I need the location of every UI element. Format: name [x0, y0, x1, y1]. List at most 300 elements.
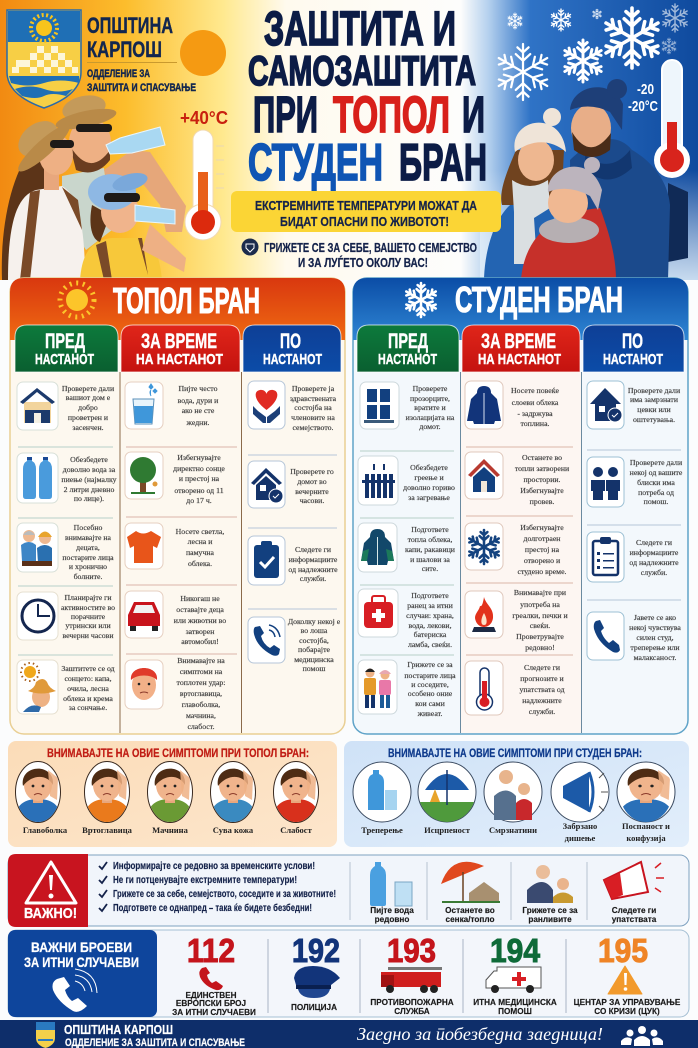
text: престој на: [525, 545, 560, 554]
icon: heart in hands: [248, 381, 285, 429]
icon: t-shirt: [125, 523, 163, 569]
text: медицинска: [294, 655, 334, 664]
icon: clipboard: [248, 536, 285, 585]
text: ламба, свеќи.: [408, 640, 452, 649]
text: отворено и: [524, 556, 560, 565]
number: 112: ЗА ИТНИ СЛУЧАЕВИ: [172, 1008, 256, 1017]
text: упатствата од: [519, 685, 565, 694]
number: 193: 193: [387, 932, 436, 969]
text: помош: [303, 664, 325, 673]
symptom labels: Треперење: [361, 825, 403, 835]
panel: heat symptoms: [8, 741, 337, 847]
text: Подгответе: [411, 525, 449, 534]
text: облека и крема: [63, 694, 113, 703]
column: before: НАСТАНОТ: [35, 351, 94, 368]
footer municipality text: ОПШТИНА КАРПОШ: [64, 1023, 173, 1037]
icon: snowflake: [465, 523, 503, 570]
temperature -20: -20°C: [628, 98, 658, 115]
column: after: ПО: [622, 330, 643, 353]
column: after: ПО: [280, 330, 301, 353]
warning banner: ЕКСТРЕМНИТЕ ТЕМПЕРАТУРИ МОЖАТ ДА: [255, 198, 477, 213]
text: и престој на: [179, 474, 220, 483]
hot thermometer: [185, 130, 224, 240]
icon: elderly and children: [17, 523, 58, 572]
text: домот во: [297, 477, 327, 486]
tip: care for vulnerable: ранливите: [528, 915, 572, 924]
number: 112: ЕДИНСТВЕН: [185, 991, 237, 1000]
text: Следете ги: [636, 538, 672, 547]
text: очила, лесна: [67, 684, 109, 693]
icon: clock: [17, 592, 58, 640]
woman: [2, 114, 85, 280]
text: Обезбедете: [410, 463, 448, 472]
text: Внимавајте на: [177, 656, 225, 665]
text: или животни во: [174, 616, 226, 625]
text: отворено од 11: [174, 486, 224, 495]
column: after: НАСТАНОТ: [603, 351, 663, 368]
column: before: ПРЕД: [45, 330, 85, 353]
icon: telephone: [248, 617, 285, 663]
text: постарите лица: [404, 671, 456, 680]
footer municipality text: [64, 1023, 245, 1048]
icon: tree: [125, 452, 163, 499]
text: блиски има: [637, 478, 675, 487]
text: слабост.: [187, 722, 215, 731]
woman: [484, 108, 566, 278]
text: Проверете: [413, 384, 448, 393]
text: директно сонце: [173, 464, 225, 473]
symptom: frostbite: [484, 762, 542, 822]
icon: warm house: [465, 452, 503, 499]
symptom labels: конфузија: [626, 833, 666, 843]
symptom: rapid breathing: [551, 762, 609, 822]
tip: follow instructions: упатствата: [612, 915, 657, 924]
text: информациите: [289, 555, 338, 564]
text: Доколку некој е: [288, 617, 341, 626]
column: during: НА НАСТАНОТ: [136, 351, 223, 368]
main title: БРАН: [399, 134, 487, 192]
text: Внимавајте при: [514, 588, 566, 597]
panel: cold symptoms: [344, 741, 689, 847]
text: топлотен удар:: [177, 678, 225, 687]
number: 193: СЛУЖБА: [394, 1007, 430, 1016]
icon: snowflake: [404, 283, 438, 317]
number: 195: СО КРИЗИ (ЦУК): [594, 1007, 660, 1016]
icon: thermometer: [465, 661, 503, 715]
icon: people: [621, 1026, 663, 1046]
text: батериска: [414, 630, 447, 639]
tip: stay in shade: Останете во: [445, 906, 495, 915]
icon: heatstroke face: [125, 660, 163, 709]
text: некој од вашите: [630, 468, 683, 477]
text: Останете во: [522, 453, 562, 462]
text: Посебно: [74, 523, 102, 532]
cold thermometer: [654, 60, 690, 178]
text: некој чувствува: [629, 623, 681, 632]
warning banner: [231, 191, 501, 232]
text: Пијте често: [178, 384, 218, 393]
symptom labels: Слабост: [280, 825, 313, 835]
main title: САМОЗАШТИТА: [248, 47, 476, 94]
text: употреба на: [520, 600, 560, 609]
text: прогнозите и: [520, 674, 564, 683]
heading box: ЗА ИТНИ СЛУЧАЕВИ: [24, 955, 139, 970]
municipality name: ОДДЕЛЕНИЕ ЗА: [87, 68, 150, 80]
text: прозорците,: [410, 394, 450, 403]
care message: ГРИЖЕТЕ СЕ ЗА СЕБЕ, ВАШЕТО СЕМЕЈСТВО: [264, 241, 477, 255]
number: 194: ПОМОШ: [498, 1007, 532, 1016]
icon: sun: [60, 283, 94, 317]
symptom labels: Поспаност и: [622, 821, 670, 831]
text: и шалови за: [410, 555, 450, 564]
text: Избегнувајте: [520, 486, 564, 495]
text: вечерните: [295, 487, 329, 496]
text: постарите лица: [62, 553, 114, 562]
text: Обезбедете: [70, 455, 108, 464]
text: засенчен.: [72, 423, 104, 432]
column: during: ЗА ВРЕМЕ: [481, 330, 556, 353]
text: потреба од: [638, 488, 674, 497]
tip: drink water: [370, 862, 414, 924]
icon: window: [360, 382, 399, 429]
column: during: НА НАСТАНОТ: [478, 351, 561, 368]
icon: glass of water: [125, 382, 163, 429]
text: живеат.: [417, 709, 442, 718]
text: Избегнувајте: [520, 523, 564, 532]
column: after: [583, 325, 684, 372]
icon: care shield: [242, 238, 258, 256]
icon: sun protection: [17, 660, 58, 714]
text: внимавајте на: [65, 533, 112, 542]
text: вашиот дом е: [66, 393, 111, 402]
text: и соседите,: [411, 680, 449, 689]
number: 194: 194: [490, 932, 541, 969]
column: before: НАСТАНОТ: [378, 351, 437, 368]
main title: СТУДЕН: [248, 134, 383, 192]
text: затворен: [186, 627, 214, 636]
municipal shield logo: [7, 10, 81, 108]
symptom: drowsiness and confusion: [617, 762, 675, 824]
text: во лоша: [301, 626, 328, 635]
text: Проверете дали: [630, 458, 682, 467]
heading: ВНИМАВАЈТЕ НА ОВИЕ СИМПТОМИ ПРИ ТОПОЛ БРАН:: [47, 746, 309, 760]
number: 194: [473, 932, 557, 1016]
text: мачнина,: [186, 711, 216, 720]
text: греалки, печки и: [512, 611, 568, 620]
text: свеќи.: [530, 621, 550, 630]
warning banner: БИДАТ ОПАСНИ ПО ЖИВОТОТ!: [280, 214, 449, 229]
tip: stay in shade: [441, 862, 500, 924]
icon: water bottles: [17, 453, 58, 503]
text: редовно!: [525, 643, 555, 652]
child: [521, 157, 616, 280]
text: Следете ги: [295, 545, 331, 554]
text: служби.: [529, 707, 555, 716]
text: капи, ракавици: [405, 545, 455, 554]
text: 2 литри дневно: [64, 485, 114, 494]
hero banner: [0, 0, 698, 280]
column: before: [15, 325, 118, 372]
symptom labels: Главоболка: [23, 825, 68, 835]
column: before: [357, 325, 459, 372]
number: 195: 195: [598, 932, 648, 969]
municipality name: ЗАШТИТА И СПАСУВАЊЕ: [87, 82, 196, 94]
text: за сончање.: [69, 703, 107, 712]
main title: ТОПОЛ: [333, 86, 450, 143]
tip: stay in shade: сенка/топло: [446, 915, 494, 924]
tip: follow instructions: [604, 862, 664, 924]
number: 194: ИТНА МЕДИЦИНСКА: [473, 998, 557, 1007]
text: Грижете се за: [407, 660, 453, 669]
text: простории.: [523, 475, 561, 484]
text: памучна: [186, 548, 215, 557]
column: during: [121, 325, 240, 372]
text: лесна и: [188, 537, 212, 546]
number: 112: 112: [187, 932, 235, 969]
text: Никогаш не: [180, 594, 220, 603]
text: Проветрувајте: [516, 632, 564, 641]
symptom labels: [361, 821, 670, 843]
symptom labels: [23, 825, 313, 835]
text: топли затворени: [515, 464, 569, 473]
text: Планирајте ги: [64, 593, 112, 602]
text: доволно вода за: [63, 465, 116, 474]
symptom: nausea: [146, 762, 194, 824]
text: облека.: [188, 559, 212, 568]
text: случаи: храна,: [406, 611, 454, 620]
icon: checklist: [587, 532, 624, 582]
text: особено оние: [408, 689, 453, 698]
text: членовите на: [291, 413, 335, 422]
main title: [248, 3, 487, 192]
column: after: НАСТАНОТ: [263, 351, 322, 368]
icon: navy jacket: [465, 381, 503, 429]
text: силен студ,: [636, 633, 674, 642]
sun: [180, 30, 226, 76]
tip: care for vulnerable: Грижете се за: [522, 906, 578, 915]
main title: И: [462, 86, 485, 143]
footer logo: [36, 1022, 55, 1048]
text: од надлежните: [629, 558, 679, 567]
text: провев.: [530, 497, 554, 506]
number: 112: [172, 932, 256, 1017]
number: 195: [574, 932, 681, 1016]
hero background: [0, 0, 698, 280]
text: оштетувања.: [633, 415, 675, 424]
text: Носете светла,: [176, 527, 224, 536]
footer: [0, 1020, 698, 1048]
number: 193: [370, 932, 454, 1016]
number: 193: ПРОТИВОПОЖАРНА: [370, 998, 454, 1007]
text: симптоми на: [180, 667, 223, 676]
text: Проверете дали: [62, 384, 114, 393]
text: жедни.: [186, 418, 210, 427]
text: слоеви облека: [512, 398, 559, 407]
text: вечерни часови: [62, 631, 114, 640]
panel: important tips: [8, 854, 689, 927]
text: греење и: [414, 473, 444, 482]
main title: ЗАШТИТА И: [264, 3, 456, 56]
text: треперење или: [630, 643, 680, 652]
text: ранец за итни: [407, 601, 453, 610]
text: активностите во: [61, 603, 115, 612]
column: before: ПРЕД: [388, 330, 428, 353]
column: after: [243, 325, 341, 372]
text: за загревање: [408, 493, 450, 502]
text: пиење (најмалку: [61, 475, 117, 484]
text: Јавете се ако: [634, 613, 676, 622]
man: [570, 79, 688, 280]
temperature -20: [628, 81, 658, 115]
checklist: Грижете се за себе, семејството, соседите и за животните!: [113, 888, 336, 900]
badge: important: ВАЖНО!: [24, 905, 77, 922]
badge: important: [8, 854, 88, 927]
text: доволно гориво: [403, 483, 455, 492]
column: during: ЗА ВРЕМЕ: [141, 330, 217, 353]
number: 112: ЕВРОПСКИ БРОЈ: [176, 999, 246, 1008]
panel: emergency numbers: [8, 930, 689, 1017]
number: 192: 192: [292, 932, 340, 969]
text: топлина.: [520, 419, 550, 428]
summer family: [2, 92, 186, 280]
checklist: Не ги потценувајте екстремните температури!: [113, 875, 297, 886]
column: during: [462, 325, 580, 372]
child's water bottle: [135, 205, 175, 224]
icon: elderly couple: [358, 660, 397, 714]
slogan: Заедно за побезбедна заедница!: [357, 1024, 603, 1044]
man: [54, 92, 186, 250]
symptom: weakness: [272, 762, 320, 824]
symptom labels: Мачнина: [152, 825, 189, 835]
text: оставајте деца: [176, 605, 224, 614]
icon: house check: [587, 381, 624, 429]
text: побарајте: [298, 645, 330, 654]
icon: house check: [248, 461, 285, 508]
text: сонцето: капа,: [64, 674, 112, 683]
number: 192: ПОЛИЦИЈА: [291, 1003, 337, 1012]
text: Проверете дали: [628, 386, 680, 395]
municipality name: КАРПОШ: [87, 37, 162, 62]
symptom labels: Исцрпеност: [424, 825, 471, 835]
text: порачните: [71, 612, 106, 621]
text: состојба на: [294, 403, 332, 412]
text: часови.: [300, 496, 324, 505]
icon: telephone: [587, 612, 624, 660]
text: добро: [78, 403, 98, 412]
text: Носете повеќе: [511, 386, 560, 395]
heading box: [8, 930, 157, 1017]
checklist: [99, 860, 336, 914]
text: вртоглавица,: [180, 689, 222, 698]
text: служби.: [300, 574, 326, 583]
icon: phone: [52, 969, 97, 1012]
text: надлежните: [522, 696, 562, 705]
heading box: ВАЖНИ БРОЕВИ: [31, 940, 132, 955]
icon: radiator: [358, 456, 398, 505]
text: домот.: [419, 422, 441, 431]
text: болните.: [74, 572, 102, 581]
text: семејството.: [292, 423, 334, 432]
icon: car: [125, 591, 163, 638]
main title: ПРИ: [253, 86, 318, 143]
text: состојба,: [299, 636, 329, 645]
text: сите.: [422, 564, 438, 573]
symptom labels: Смрзнатини: [489, 825, 537, 835]
winter family: [484, 79, 688, 280]
care message: И ЗА ЛУЃЕТО ОКОЛУ ВАС!: [298, 255, 428, 270]
icon: green jacket: [358, 523, 397, 572]
text: Проверете го: [290, 467, 334, 476]
number: 195: ЦЕНТАР ЗА УПРАВУВАЊЕ: [574, 998, 681, 1007]
icon: flame: [465, 591, 503, 638]
text: автомобил!: [181, 637, 219, 646]
checklist: Информирајте се редовно за временските услови!: [113, 860, 315, 872]
icon: house: [17, 382, 58, 430]
text: утрински или: [65, 621, 111, 630]
number: 192: [291, 932, 340, 1012]
municipality name: ОПШТИНА: [87, 13, 173, 38]
text: долготраен: [524, 534, 560, 543]
text: Заштитете се од: [61, 664, 115, 673]
text: кои сами: [415, 699, 445, 708]
panel: heat wave: [10, 278, 345, 734]
text: главоболка,: [182, 700, 220, 709]
text: здравствената: [290, 394, 337, 403]
panel: cold wave: [353, 278, 688, 734]
child: [80, 170, 186, 280]
icon: first aid kit: [358, 589, 398, 637]
tip: follow instructions: Следете ги: [612, 906, 656, 915]
snowflakes: [495, 4, 689, 100]
tip: drink water: редовно: [375, 915, 409, 924]
icon: two people: [587, 457, 624, 507]
temperature -20: -20: [637, 81, 654, 98]
symptom labels: Забрзано: [563, 821, 597, 831]
symptom labels: дишење: [565, 833, 596, 843]
text: вода, дури и: [178, 396, 218, 405]
municipality name: [87, 13, 196, 94]
symptom labels: Сува кожа: [213, 825, 254, 835]
temperature +40: +40°C: [180, 108, 228, 128]
text: има замрзнати: [630, 395, 678, 404]
text: од надлежните: [288, 565, 338, 574]
text: вратите и: [414, 403, 446, 412]
text: Подгответе: [411, 591, 449, 600]
text: помош.: [644, 497, 668, 506]
text: до 17 ч.: [186, 496, 212, 505]
care message: [264, 241, 477, 270]
text: - задржува: [517, 409, 553, 418]
text: по лице).: [74, 494, 104, 503]
symptom: dry skin: [209, 762, 257, 824]
text: и хронично: [69, 562, 107, 571]
text: вода, лекови,: [408, 621, 452, 630]
checklist: Подгответе се однапред – така ќе бидете безбедни!: [113, 902, 312, 914]
text: децата,: [76, 543, 100, 552]
symptom: exhaustion: [418, 762, 476, 822]
symptom labels: Вртоглавица: [82, 825, 133, 835]
text: Следете ги: [524, 663, 560, 672]
symptom: shivering: [353, 762, 411, 822]
text: ако не сте: [182, 406, 215, 415]
text: Проверете ја: [292, 384, 335, 393]
text: Избегнувајте: [177, 453, 221, 462]
text: малаксаност.: [634, 653, 676, 662]
text: студено време.: [517, 567, 567, 576]
text: проветрен и: [68, 413, 108, 422]
text: служби.: [641, 568, 667, 577]
text: цевки или: [637, 405, 671, 414]
